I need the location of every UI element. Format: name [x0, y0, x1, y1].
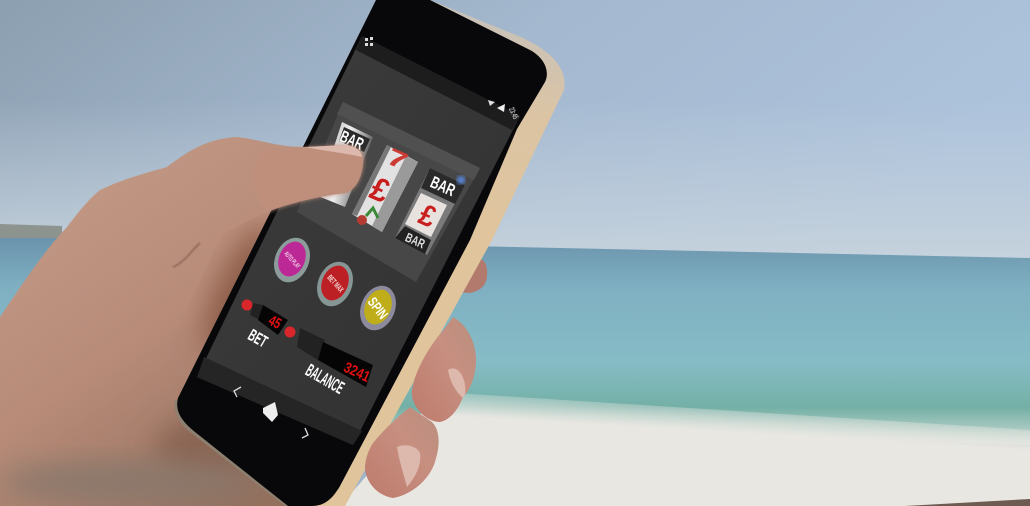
finger: middle: [412, 317, 476, 422]
phone bottom silver edge: [174, 400, 300, 506]
status bar: [356, 36, 520, 130]
bet label: BET: [245, 325, 271, 352]
pound symbol: £: [365, 169, 396, 210]
balance label: BALANCE: [302, 360, 348, 398]
bet decrease arrow: [242, 300, 252, 310]
nav forward chevron: [302, 428, 308, 438]
hand: [120, 137, 476, 498]
icon: network: [365, 37, 373, 46]
cherry symbol: [357, 208, 378, 225]
phone gold frame: [290, 0, 565, 506]
thumb crease: [173, 243, 200, 267]
button: auto play: AUTO PLAY: [282, 251, 301, 270]
button: bet max: BET MAX: [325, 273, 346, 294]
bet display: 45: [265, 312, 284, 333]
thumb: [120, 137, 363, 267]
bet increase arrow: [284, 326, 296, 338]
nav back chevron: [234, 387, 241, 397]
bet display: [250, 303, 288, 335]
background: sand: [340, 392, 1030, 506]
icon: signal: [497, 104, 505, 112]
balance display: 3241: [341, 359, 373, 386]
phone: [174, 0, 565, 506]
reel 3: [395, 168, 465, 255]
finger behind phone: [455, 259, 487, 293]
reel 3: BAR: [403, 230, 428, 252]
phone black body: [177, 0, 547, 506]
button: spin: [354, 280, 402, 336]
reel 1: BAR: [337, 127, 367, 154]
fingernail: [397, 445, 420, 487]
status time: 23:45: [507, 106, 520, 121]
reel 2: [352, 143, 418, 232]
finger: ring: [365, 407, 439, 498]
thumb fingertip tone: [254, 145, 363, 212]
button: bet max: [311, 256, 359, 312]
nav home icon: [263, 402, 278, 422]
reel 3: £: [414, 198, 441, 235]
nav bar upper shade: [197, 357, 362, 445]
button: spin: SPIN: [365, 294, 391, 322]
background: sea: [0, 224, 1030, 445]
palm: [0, 137, 300, 506]
balance display: [297, 328, 373, 387]
screen: [197, 36, 520, 445]
seven symbol: 7: [383, 143, 412, 176]
button: auto play: [268, 232, 316, 288]
background: sky: [0, 0, 1030, 270]
thumbnail: [305, 145, 362, 157]
fingernail: [448, 368, 465, 398]
reel panel: [297, 102, 480, 282]
icon: wifi: [488, 100, 495, 106]
reel 1: [318, 122, 373, 207]
reel 3: BAR: [428, 173, 458, 200]
